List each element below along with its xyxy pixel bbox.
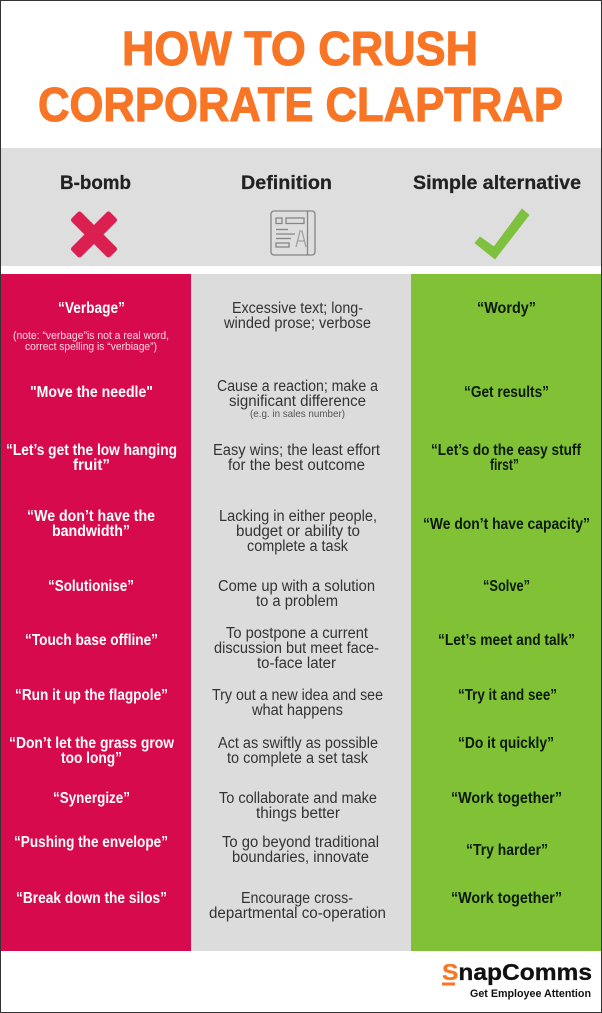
alternative: work together again: “Work together” bbox=[451, 890, 562, 907]
definition: Touch base offline: to-face later bbox=[257, 655, 336, 672]
definition: Solutionise: to a problem bbox=[256, 593, 338, 610]
phrase: Solutionise: “Solutionise” bbox=[48, 578, 134, 595]
phrase: grass grow: “Don’t let the grass grow bbox=[9, 735, 175, 752]
definition: Pushing the envelope: To go beyond traditional bbox=[222, 834, 379, 851]
definition: Move the needle: (e.g. in sales number) bbox=[250, 408, 345, 420]
definition: bandwidth: Lacking in either people, bbox=[219, 508, 377, 525]
panel: column header band bbox=[1, 148, 601, 266]
definition: Break down the silos: departmental co-operation bbox=[209, 905, 386, 922]
phrase: Touch base offline: “Touch base offline” bbox=[25, 632, 158, 649]
definition: bandwidth: complete a task bbox=[247, 538, 348, 555]
definition: Synergize bbox=[219, 790, 377, 822]
alternative: meet and talk: “Let’s meet and talk” bbox=[438, 632, 575, 649]
phrase: low hanging fruit: “Let’s get the low hanging bbox=[6, 442, 177, 459]
phrase: Break down the silos: “Break down the silos” bbox=[16, 890, 167, 907]
phrase: bandwidth: bandwidth” bbox=[52, 523, 130, 540]
phrase: Synergize: “Synergize” bbox=[53, 790, 130, 807]
logo: SnapComms: SnapComms bbox=[442, 959, 592, 985]
icon: green check mark bbox=[475, 209, 529, 259]
definition: low hanging fruit bbox=[213, 442, 381, 474]
phrase: bandwidth: “We don’t have the bbox=[27, 508, 155, 525]
phrase: Move the needle: "Move the needle" bbox=[30, 384, 153, 401]
definition: Break down the silos bbox=[209, 890, 386, 922]
alternative: easy stuff first: first” bbox=[490, 457, 519, 474]
phrase: Verbage: “Verbage” bbox=[58, 300, 125, 317]
definition: low hanging fruit: Easy wins; the least effort bbox=[213, 442, 381, 459]
definition: Touch base offline bbox=[214, 625, 379, 672]
definition: Break down the silos: Encourage cross- bbox=[241, 890, 353, 907]
phrase: bandwidth bbox=[27, 508, 155, 540]
phrase: Verbage: (note: “verbage”is not a real word, bbox=[13, 330, 169, 342]
definition: Touch base offline: To postpone a current bbox=[226, 625, 369, 642]
definition: Synergize: To collaborate and make bbox=[219, 790, 377, 807]
alternative: Wordy: “Wordy” bbox=[477, 300, 536, 317]
title bbox=[38, 23, 563, 132]
phrase: grass grow: too long” bbox=[61, 750, 122, 767]
alternative: Solve: “Solve” bbox=[483, 578, 530, 595]
alternative: try harder: “Try harder” bbox=[466, 842, 548, 859]
definition: Verbage bbox=[223, 300, 371, 332]
phrase: low hanging fruit bbox=[6, 442, 177, 474]
definition: Verbage: Excessive text; long- bbox=[232, 300, 363, 317]
definition: Solutionise: Come up with a solution bbox=[218, 578, 375, 595]
icon: red cross bbox=[70, 210, 118, 259]
panel: B-bomb column bbox=[1, 274, 191, 951]
alternative: work together: “Work together” bbox=[451, 790, 562, 807]
definition: Move the needle: Cause a reaction; make a bbox=[217, 378, 378, 395]
definition: flagpole bbox=[212, 687, 383, 719]
phrase: Pushing the envelope: “Pushing the envelope” bbox=[14, 834, 168, 851]
phrase: Verbage bbox=[13, 300, 169, 353]
heading: Definition: Definition bbox=[241, 173, 332, 194]
definition: grass grow: to complete a set task bbox=[227, 750, 368, 767]
logo: SnapComms bbox=[442, 959, 592, 1000]
phrase: grass grow bbox=[9, 735, 175, 767]
phrase: Verbage: correct spelling is “verbiage”) bbox=[25, 341, 157, 353]
icon: document bbox=[271, 211, 315, 255]
definition: low hanging fruit: for the best outcome bbox=[228, 457, 365, 474]
phrase: low hanging fruit: fruit” bbox=[73, 457, 110, 474]
panel: Definition column bbox=[191, 274, 411, 951]
alternative: easy stuff first bbox=[431, 442, 582, 474]
definition: grass grow: Act as swiftly as possible bbox=[218, 735, 378, 752]
panel: Simple alternative column bbox=[411, 274, 601, 951]
definition: flagpole: Try out a new idea and see bbox=[212, 687, 383, 704]
definition: Pushing the envelope: boundaries, innovate bbox=[232, 849, 369, 866]
title: CORPORATE CLAPTRAP bbox=[38, 79, 563, 132]
logo: SnapComms: Get Employee Attention bbox=[470, 988, 591, 1000]
definition: flagpole: what happens bbox=[251, 702, 343, 719]
definition: Solutionise bbox=[218, 578, 375, 610]
alternative: Get results: “Get results” bbox=[464, 384, 549, 401]
definition: Move the needle: significant difference bbox=[229, 393, 366, 410]
definition: grass grow bbox=[218, 735, 378, 767]
heading: Simple alternative: Simple alternative bbox=[413, 173, 581, 194]
definition: Pushing the envelope bbox=[222, 834, 379, 866]
phrase: flagpole: “Run it up the flagpole” bbox=[15, 687, 168, 704]
definition: bandwidth bbox=[219, 508, 377, 555]
definition: Synergize: things better bbox=[256, 805, 340, 822]
definition: bandwidth: budget or ability to bbox=[236, 523, 360, 540]
definition: Verbage: winded prose; verbose bbox=[223, 315, 371, 332]
definition: Touch base offline: discussion but meet face- bbox=[214, 640, 379, 657]
alternative: easy stuff first: “Let’s do the easy stuff bbox=[431, 442, 582, 459]
alternative: do it quickly: “Do it quickly” bbox=[458, 735, 554, 752]
heading: B-bomb: B-bomb bbox=[60, 173, 131, 194]
definition: Move the needle bbox=[217, 378, 378, 420]
title: HOW TO CRUSH bbox=[122, 23, 478, 76]
alternative: try it and see: “Try it and see” bbox=[458, 687, 557, 704]
